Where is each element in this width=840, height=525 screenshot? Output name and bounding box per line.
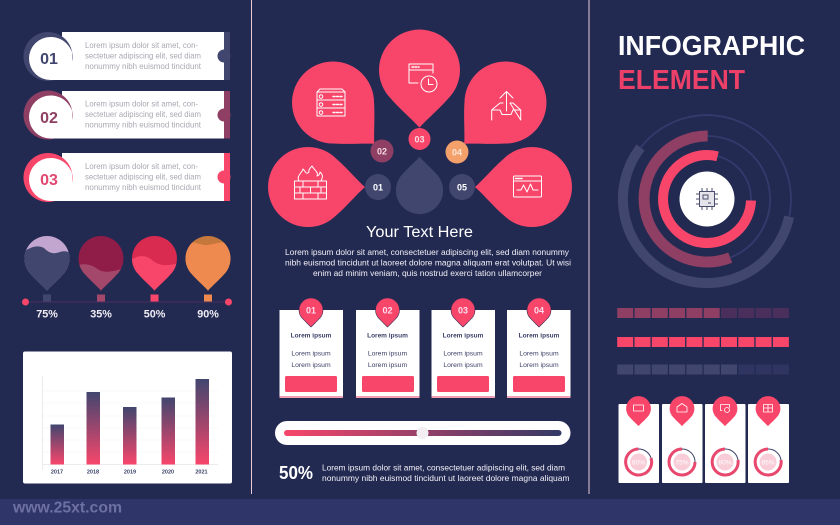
petal 04: upload tray: 04	[452, 148, 462, 158]
card 04: 04	[534, 306, 544, 316]
center drop	[396, 157, 443, 214]
bar row 2	[617, 337, 789, 347]
metric card 1: 80%	[632, 460, 645, 466]
body paragraph	[285, 247, 571, 278]
card 02: 02	[382, 306, 393, 316]
slider	[275, 421, 570, 445]
card 02: Lorem ipsum	[368, 362, 407, 369]
card 03	[432, 298, 495, 398]
panel: numbered list	[24, 32, 230, 202]
card 01: Lorem ipsum	[291, 350, 331, 358]
bar 2020	[162, 398, 175, 476]
body paragraph: enim ad minim veniam, quis nostrud exerci tation ullamcorper	[313, 268, 542, 278]
balloon 35%	[78, 236, 124, 318]
list item 03: sectetuer adipiscing elit, sed diam	[85, 172, 201, 182]
bar row 3	[617, 364, 789, 374]
list item 03: Lorem ipsum dolor sit amet, con-	[85, 162, 198, 171]
petal 02: server: 02	[377, 146, 387, 156]
body paragraph: nibh euismod tincidunt ut laoreet dolore magna aliquam erat volutpat. Ut wisi	[285, 258, 571, 268]
card 04: Lorem ipsum	[519, 332, 560, 340]
card 03: 03	[458, 306, 468, 316]
panel: metric cards	[618, 396, 789, 483]
panel: bar chart	[23, 352, 232, 484]
metric card 4: 85%	[761, 460, 775, 466]
metric card 1	[618, 396, 659, 483]
petal 01: firewall	[268, 147, 391, 227]
metric card 2	[662, 396, 702, 483]
balloon 75%: 75%	[36, 308, 58, 320]
card 01: Lorem ipsum	[291, 332, 332, 340]
timeline dot right	[225, 298, 232, 306]
balloon 90%	[186, 236, 230, 318]
radial chart	[623, 115, 791, 283]
petal 03: schedule window: 03	[414, 134, 425, 144]
stat: 50%	[279, 462, 570, 483]
bar 2019	[123, 407, 136, 476]
balloon 90%: 90%	[197, 308, 219, 320]
bar 2021	[195, 379, 209, 476]
bar 2017: 2017	[51, 470, 63, 476]
segmented progress bars	[617, 308, 789, 374]
title: INFOGRAPHIC	[618, 30, 805, 61]
footer band	[0, 499, 840, 525]
bar 2020: 2020	[162, 470, 174, 476]
balloon 35%: 35%	[90, 308, 112, 320]
heading: your text here: Your Text Here	[366, 224, 473, 241]
stat: 50%: nonummy nibh euismod tincidunt ut laoreet dolore magna aliquam	[322, 473, 570, 483]
card 01: Lorem ipsum	[291, 362, 331, 369]
card 01	[280, 298, 343, 398]
list item 01: sectetuer adipiscing elit, sed diam	[85, 52, 201, 60]
watermark: www.25xt.com	[12, 500, 122, 516]
card 02: Lorem ipsum	[368, 350, 407, 358]
petal 05: monitor	[449, 147, 572, 227]
petal 01: firewall: 01	[373, 182, 383, 192]
balloon 50%: 50%	[144, 308, 166, 320]
metric card 3: 80%	[718, 460, 732, 466]
list item 02: 02	[40, 110, 58, 127]
list item 02	[24, 90, 230, 140]
card 03: Lorem ipsum	[443, 332, 484, 340]
metric card 4	[748, 396, 789, 483]
list item 02: Lorem ipsum dolor sit amet, con-	[85, 100, 198, 108]
icon: chip	[696, 188, 718, 210]
metric card 2: 75%	[675, 460, 689, 466]
bar 2021: 2021	[195, 470, 208, 476]
list item 01	[24, 32, 230, 81]
balloon 75%	[24, 236, 70, 318]
stat: 50%: 50%	[279, 462, 313, 483]
body paragraph: Lorem ipsum dolor sit amet, consectetuer adipiscing elit, sed diam nonummy	[285, 247, 570, 257]
metric card 3	[705, 396, 746, 483]
card 01: 01	[306, 306, 316, 316]
card 04: Lorem ipsum	[519, 350, 559, 358]
list item 02: sectetuer adipiscing elit, sed diam	[85, 110, 201, 119]
panel: pricing cards	[280, 298, 570, 398]
bar 2017	[50, 424, 64, 476]
list item 01: nonummy nibh euismod tincidunt	[85, 62, 202, 71]
card 04	[507, 298, 570, 398]
panel: balloon percentages	[22, 236, 232, 318]
list item 03: nonummy nibh euismod tincidunt	[85, 183, 202, 192]
bar 2018: 2018	[87, 470, 99, 476]
balloon 50%	[132, 236, 177, 318]
card 04: Lorem ipsum	[519, 362, 559, 369]
petal 03: schedule window	[379, 30, 460, 150]
bar 2019: 2019	[124, 470, 136, 476]
petal 05: monitor: 05	[457, 182, 467, 192]
list item 03	[24, 153, 230, 202]
list item 03: 03	[40, 172, 58, 189]
list item 02: nonummy nibh euismod tincidunt	[85, 120, 202, 130]
petal 04: upload tray	[435, 45, 563, 173]
card 02	[356, 298, 420, 398]
title	[618, 30, 805, 95]
card 03: Lorem ipsum	[443, 350, 483, 358]
list item 01: Lorem ipsum dolor sit amet, con-	[85, 41, 198, 50]
stat: 50%: Lorem ipsum dolor sit amet, consectetuer adipiscing elit, sed diam	[322, 462, 565, 472]
list item 01: 01	[40, 51, 58, 68]
card 03: Lorem ipsum	[443, 362, 483, 369]
bar row 1	[617, 308, 789, 318]
panel: petal diagram	[268, 30, 572, 227]
bar 2018	[86, 392, 100, 476]
title: ELEMENT	[618, 64, 745, 95]
timeline dot left	[22, 298, 29, 306]
petal 02: server	[275, 45, 403, 173]
card 02: Lorem ipsum	[367, 332, 408, 340]
